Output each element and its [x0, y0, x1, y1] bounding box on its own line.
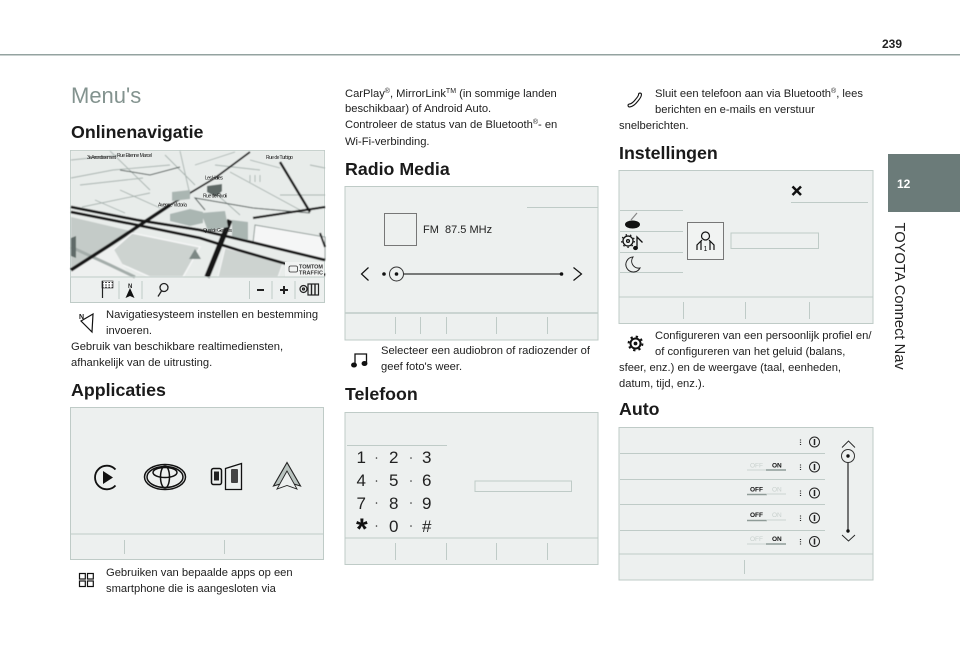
- dial pad: 1: [356, 448, 366, 467]
- dial pad: 9: [422, 494, 431, 513]
- toggle rows: OFF: [750, 536, 763, 543]
- panel: vehicle: [619, 428, 873, 580]
- dial pad: #: [422, 517, 432, 536]
- TomTom traffic logo: TOMTOM: [299, 264, 323, 270]
- dial pad: [356, 448, 432, 546]
- text: applications: [106, 567, 293, 595]
- text: carplay: beschikbaar) of Android Auto.: [345, 103, 491, 115]
- chapter title vertical: TOYOTA Connect Nav: [891, 222, 907, 370]
- text: carplay: Wi-Fi-verbinding.: [345, 136, 430, 148]
- chapter tab: 12: [897, 177, 911, 191]
- icon: north arrow: N: [128, 284, 132, 290]
- heading: Instellingen: Instellingen: [619, 143, 718, 163]
- icon: minus: [257, 289, 264, 291]
- toggle rows: OFF: [750, 512, 763, 519]
- dial pad: *: [356, 513, 368, 546]
- heading: Auto: Auto: [619, 399, 660, 419]
- page number: 239: [882, 37, 902, 51]
- page header rule: [0, 54, 960, 56]
- heading: Radio Media: Radio Media: [345, 159, 450, 179]
- TomTom traffic logo: TRAFFIC: [299, 270, 323, 276]
- TomTom traffic logo: [285, 262, 324, 277]
- heading: Onlinenavigatie: Onlinenavigatie: [71, 122, 204, 142]
- toggle rows: ON: [772, 486, 782, 494]
- text: settings: datum, tijd, enz.).: [619, 378, 705, 390]
- map drawing: [71, 151, 325, 277]
- text: settings: [619, 330, 872, 390]
- dial pad: 5: [389, 471, 398, 490]
- text: bluetooth: snelberichten.: [619, 120, 689, 132]
- icon: music note: [352, 354, 367, 367]
- icon: android auto: [274, 462, 300, 489]
- input field: [475, 481, 572, 492]
- toggle rows: [747, 462, 786, 544]
- heading: Applicaties: Applicaties: [71, 380, 166, 400]
- profile box: 1: [704, 246, 708, 253]
- text: settings: Configureren van een persoonlijk profiel en/: [655, 330, 872, 342]
- panel: radio: [345, 186, 598, 340]
- info icons: [800, 437, 820, 546]
- panel: navigation map: [70, 150, 325, 302]
- dial pad: 0: [389, 517, 398, 536]
- map labels: Rue de Rivoli: [203, 194, 227, 200]
- dial pad: 6: [422, 471, 431, 490]
- icon: media play: [95, 466, 116, 489]
- toggle rows: ON: [772, 536, 782, 543]
- dial pad: 7: [356, 494, 366, 513]
- heading: Telefoon: Telefoon: [345, 384, 418, 404]
- icon: moon: [626, 257, 640, 272]
- profile box: [688, 222, 724, 260]
- icon: search: [158, 284, 168, 296]
- dial pad: 8: [389, 494, 398, 513]
- text: bluetooth: [619, 87, 863, 132]
- icon: north arrow: [126, 284, 134, 298]
- toggle rows: ON: [772, 462, 782, 470]
- icon: plus: [280, 286, 288, 294]
- text: carplay: , MirrorLink: [390, 88, 446, 100]
- text: applications: smartphone die is aangesloten via: [106, 583, 277, 595]
- icon: settings gear: [629, 337, 642, 350]
- chapter tab: [888, 154, 960, 212]
- dial pad: 2: [389, 448, 398, 467]
- icon: Toyota logo: [144, 464, 186, 490]
- toggle rows: ON: [772, 512, 782, 519]
- icon: navigation: [79, 314, 93, 332]
- text: radio: [381, 345, 591, 373]
- icon: checkered flag: [102, 281, 113, 298]
- map labels: 3e Arrondissement: [87, 155, 117, 161]
- text: carplay: (in sommige landen: [456, 88, 557, 100]
- map labels: Les Halles: [205, 176, 224, 182]
- vertical slider: [842, 441, 855, 541]
- toggle rows: OFF: [750, 462, 763, 470]
- text: settings: of configureren van het geluid (balans,: [655, 346, 845, 358]
- text: settings: sfeer, enz.) en de weergave (taal, eenheden,: [619, 362, 841, 374]
- text: navigation: afhankelijk van de uitrusting.: [71, 357, 212, 369]
- text: carplay: [345, 87, 557, 148]
- icon: sound settings: [622, 235, 642, 250]
- dial pad: 4: [356, 471, 366, 490]
- frequency slider: [362, 267, 582, 281]
- profile name field: [731, 233, 818, 248]
- title: Menu's: [71, 83, 141, 108]
- text: bluetooth: berichten en e-mails en verstuur: [655, 104, 815, 116]
- album art box: [384, 214, 416, 246]
- text: applications: Gebruiken van bepaalde apps op een: [106, 567, 293, 579]
- text: navigation: Gebruik van beschikbare realtimediensten,: [71, 341, 283, 353]
- text: carplay: ®: [385, 87, 391, 95]
- map labels: Rue Etienne Marcel: [117, 153, 152, 159]
- station label: FM 87.5 MHz: [423, 224, 492, 236]
- toggle rows: OFF: [750, 486, 763, 494]
- text: navigation: invoeren.: [106, 325, 152, 337]
- text: carplay: - en: [538, 119, 557, 131]
- icon: palette: [625, 213, 640, 228]
- text: carplay: CarPlay: [345, 88, 385, 100]
- panel: settings: [619, 170, 873, 324]
- text: carplay: TM: [446, 88, 456, 95]
- panel: phone: [345, 412, 598, 564]
- text: navigation: [71, 309, 318, 369]
- icon: mirror phones: [212, 464, 242, 490]
- text: carplay: ®: [533, 118, 539, 126]
- icon: navigation: N: [79, 314, 84, 321]
- text: radio: geef foto's weer.: [381, 361, 462, 373]
- toolbar: [71, 277, 324, 299]
- text: navigation: Navigatiesysteem instellen en bestemming: [106, 309, 318, 321]
- text: carplay: Controleer de status van de Bluetooth: [345, 119, 533, 131]
- icon: apps grid: [80, 574, 93, 586]
- map labels: [87, 153, 293, 234]
- dial pad: 3: [422, 448, 431, 467]
- map labels: Rue de Turbigo: [266, 155, 293, 161]
- icon: phone handset: [630, 94, 640, 106]
- map labels: Quai de Gesvres: [203, 228, 232, 234]
- icon: map settings: [300, 284, 318, 295]
- panel: applications: [70, 408, 324, 560]
- text: bluetooth: ®: [831, 87, 837, 95]
- map labels: Avenue Victoria: [158, 202, 187, 208]
- text: bluetooth: Sluit een telefoon aan via Bluetooth: [655, 88, 831, 100]
- text: bluetooth: , lees: [836, 88, 863, 100]
- text: radio: Selecteer een audiobron of radiozender of: [381, 345, 591, 357]
- icon: close: [792, 186, 801, 195]
